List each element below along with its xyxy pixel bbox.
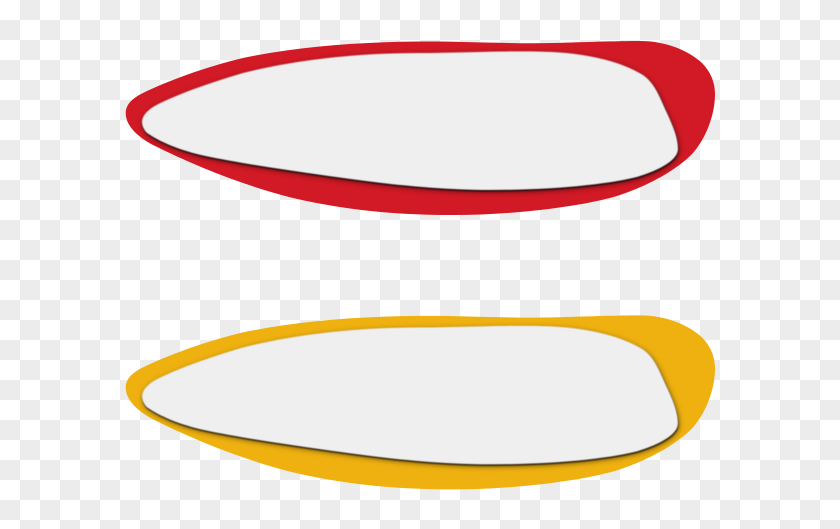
panel: yellow badge: [126, 315, 715, 489]
panel: red badge: [126, 41, 715, 215]
light grey inner panel, yellow badge: [142, 326, 678, 464]
yellow backing shape: [126, 315, 715, 489]
red backing shape: [126, 41, 715, 215]
light grey inner panel, red badge: [142, 51, 678, 190]
